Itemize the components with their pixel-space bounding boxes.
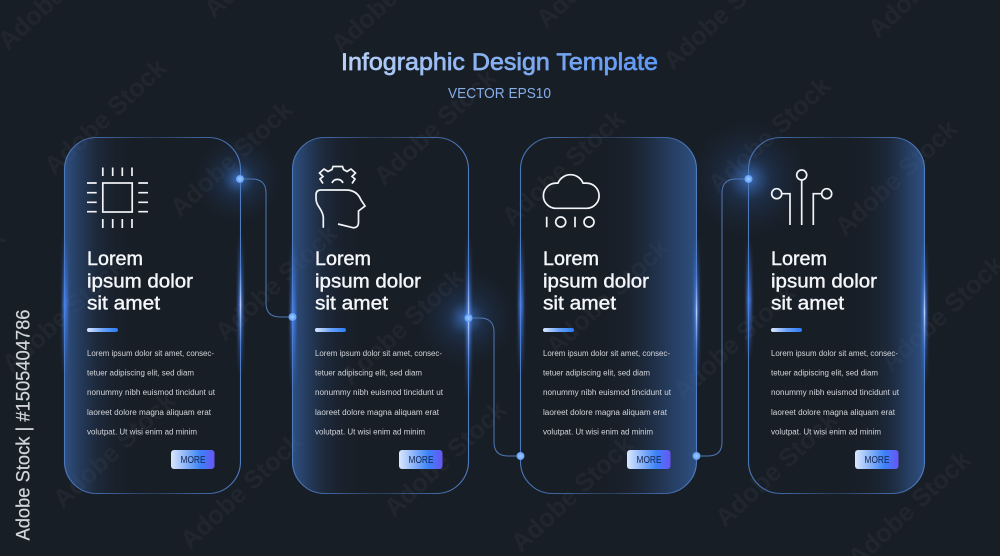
- connector: card 2 to card 3: [468, 318, 521, 456]
- heading: Lorem: [771, 249, 827, 270]
- body text: [771, 349, 900, 436]
- stock watermarks: Adobe Stock: [336, 263, 470, 391]
- heading: ipsum dolor: [87, 272, 194, 292]
- body text: Lorem ipsum dolor sit amet, consec-: [543, 349, 670, 358]
- panel: card 3: [518, 138, 699, 494]
- heading: [87, 249, 194, 314]
- heading: sit amet: [315, 294, 389, 314]
- heading: sit amet: [87, 294, 161, 314]
- stock watermarks: Adobe Stock: [710, 405, 844, 533]
- heading: [543, 249, 650, 314]
- stock watermarks: Adobe Stock: [497, 104, 631, 232]
- body text: nonummy nibh euismod tincidunt ut: [87, 388, 216, 397]
- heading: ipsum dolor: [315, 272, 422, 292]
- heading: ipsum dolor: [543, 272, 650, 292]
- connector: card 1 to card 2: [240, 179, 292, 317]
- title: Infographic Design Template: [341, 49, 658, 76]
- body text: nonummy nibh euismod tincidunt ut: [315, 388, 444, 397]
- heading: sit amet: [771, 294, 845, 314]
- button: more: MORE: [636, 455, 662, 466]
- button: more: [171, 450, 214, 469]
- connector nodes: [236, 175, 752, 460]
- heading: [315, 249, 422, 314]
- button: more: [627, 450, 670, 469]
- panel: card 1: [62, 138, 243, 494]
- panel: card 4: [746, 138, 927, 494]
- stock watermarks: Adobe Stock: [379, 395, 513, 523]
- heading: sit amet: [543, 294, 617, 314]
- body text: Lorem ipsum dolor sit amet, consec-: [87, 349, 214, 358]
- button: more: MORE: [180, 455, 206, 466]
- body text: tetuer adipiscing elit, sed diam: [771, 368, 878, 378]
- icon: microchip: [87, 168, 148, 228]
- stock watermarks: Adobe Stock: [165, 95, 299, 223]
- stock watermarks: Adobe Stock: [39, 53, 173, 181]
- body text: laoreet dolore magna aliquam erat: [315, 408, 440, 417]
- icon: circuit nodes: [772, 170, 832, 225]
- stock watermarks: Adobe Stock: [48, 386, 182, 514]
- body text: [315, 349, 444, 436]
- button: more: MORE: [408, 455, 434, 466]
- glow: node halos: [192, 117, 811, 370]
- body text: volutpat. Ut wisi enim ad minim: [771, 428, 881, 436]
- button: more: [399, 450, 442, 469]
- stock watermarks: Adobe Stock: [668, 278, 802, 406]
- stock id vertical label: Adobe Stock | #1505404786: [14, 310, 34, 540]
- heading: ipsum dolor: [771, 272, 878, 292]
- stock watermarks: Adobe Stock: [175, 427, 309, 555]
- button: more: MORE: [864, 455, 890, 466]
- body text: volutpat. Ut wisi enim ad minim: [87, 428, 197, 436]
- button: more: [855, 450, 898, 469]
- icon: head with gear: [316, 166, 365, 228]
- body text: Lorem ipsum dolor sit amet, consec-: [315, 349, 442, 358]
- body text: nonummy nibh euismod tincidunt ut: [771, 388, 900, 397]
- body text: volutpat. Ut wisi enim ad minim: [315, 428, 425, 436]
- accent bar: [543, 328, 574, 332]
- heading: Lorem: [543, 249, 599, 270]
- body text: volutpat. Ut wisi enim ad minim: [543, 428, 653, 436]
- stock watermarks: Adobe Stock: [506, 430, 640, 556]
- stock watermarks: Adobe Stock: [703, 71, 837, 199]
- stock watermarks: Adobe Stock: [830, 114, 964, 242]
- body text: nonummy nibh euismod tincidunt ut: [543, 388, 672, 397]
- accent bar: [771, 328, 802, 332]
- stock watermarks: Adobe Stock: [0, 251, 131, 379]
- stock watermarks: Adobe Stock: [541, 233, 675, 361]
- body text: laoreet dolore magna aliquam erat: [543, 408, 668, 417]
- accent bar: [87, 328, 118, 332]
- heading: Lorem: [87, 249, 143, 270]
- body text: [87, 349, 216, 436]
- heading: Lorem: [315, 249, 371, 270]
- panel: card 2: [290, 138, 471, 494]
- body text: laoreet dolore magna aliquam erat: [771, 408, 896, 417]
- body text: Lorem ipsum dolor sit amet, consec-: [771, 349, 898, 358]
- body text: tetuer adipiscing elit, sed diam: [87, 368, 194, 378]
- connector: card 3 to card 4: [696, 179, 749, 456]
- body text: tetuer adipiscing elit, sed diam: [315, 368, 422, 378]
- accent bar: [315, 328, 346, 332]
- body text: laoreet dolore magna aliquam erat: [87, 408, 212, 417]
- body text: tetuer adipiscing elit, sed diam: [543, 368, 650, 378]
- body text: [543, 349, 672, 436]
- stock watermarks: Adobe Stock: [369, 63, 503, 191]
- stock watermarks: Adobe Stock: [210, 219, 344, 347]
- subtitle: VECTOR EPS10: [448, 85, 551, 102]
- heading: [771, 249, 878, 314]
- icon: cloud with binary: [543, 175, 599, 227]
